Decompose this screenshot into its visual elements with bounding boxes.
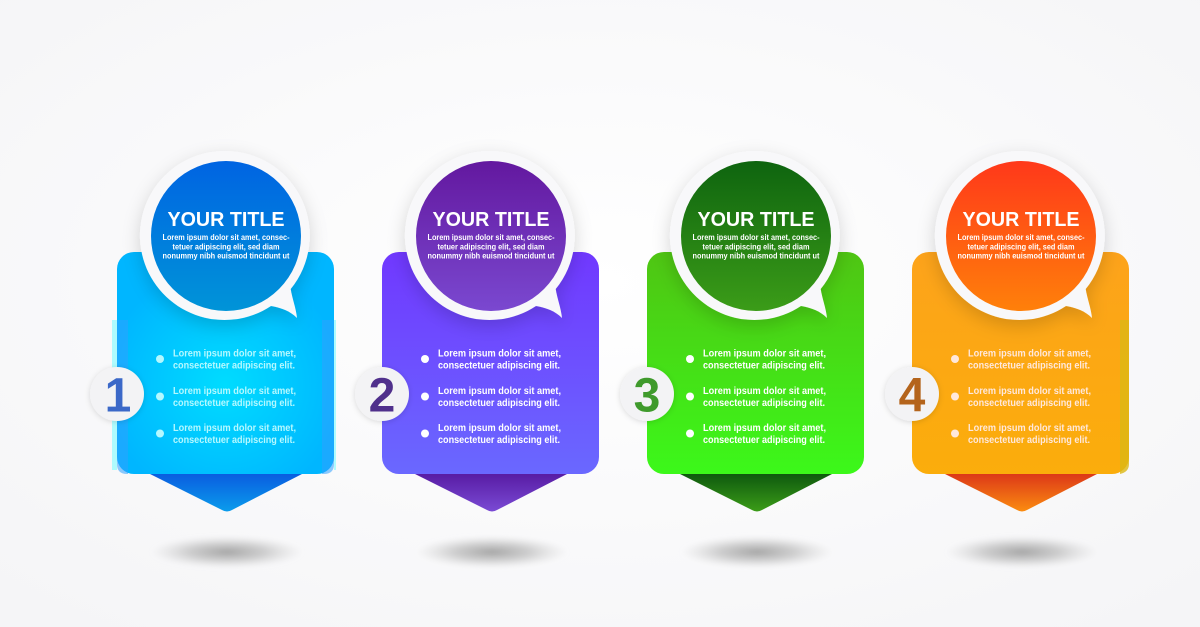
- circle description: nonummy nibh euismod tincidunt ut: [692, 250, 820, 260]
- bullet list: Lorem ipsum dolor sit amet,: [703, 423, 826, 434]
- title circle: [946, 161, 1096, 311]
- bullet list: consectetuer adipiscing elit.: [968, 360, 1090, 372]
- panel: step 4: [885, 151, 1129, 568]
- number badge 4: 4: [899, 370, 926, 422]
- speech bubble: [670, 151, 840, 320]
- circle description: nonummy nibh euismod tincidunt ut: [162, 250, 290, 260]
- bullet list: consectetuer adipiscing elit.: [173, 360, 295, 372]
- bullet list: [686, 348, 826, 446]
- card body: [912, 252, 1129, 474]
- arrow tab: [680, 474, 832, 512]
- bullet list: Lorem ipsum dolor sit amet,: [438, 348, 561, 360]
- circle description: Lorem ipsum dolor sit amet, consec-: [162, 232, 290, 242]
- bullet list: Lorem ipsum dolor sit amet,: [968, 423, 1091, 434]
- title circle: [416, 161, 566, 311]
- circle description: [692, 232, 820, 260]
- circle description: tetuer adipiscing elit, sed diam: [438, 242, 544, 252]
- bullet list: Lorem ipsum dolor sit amet,: [968, 386, 1091, 397]
- artefact fringe: [112, 320, 336, 470]
- circle description: Lorem ipsum dolor sit amet, consec-: [692, 232, 820, 242]
- circle description: [958, 232, 1085, 260]
- circle title: YOUR TITLE: [432, 209, 550, 231]
- panel: step 1: [90, 151, 336, 568]
- panel: step 2: [355, 151, 599, 568]
- bullet list: consectetuer adipiscing elit.: [173, 435, 295, 446]
- bullet list: consectetuer adipiscing elit.: [703, 360, 825, 372]
- circle description: tetuer adipiscing elit, sed diam: [702, 242, 810, 252]
- number badge 3: [620, 367, 674, 422]
- bullet list: consectetuer adipiscing elit.: [968, 398, 1090, 409]
- number badge 3: 3: [634, 370, 660, 422]
- circle description: Lorem ipsum dolor sit amet, consec-: [428, 232, 555, 242]
- arrow tab: [150, 474, 302, 512]
- bullet list: Lorem ipsum dolor sit amet,: [173, 386, 296, 397]
- circle title: YOUR TITLE: [168, 209, 284, 231]
- card side tint: [117, 320, 334, 474]
- title circle: [151, 161, 301, 311]
- circle description: Lorem ipsum dolor sit amet, consec-: [958, 232, 1085, 242]
- bullet list: consectetuer adipiscing elit.: [438, 435, 560, 446]
- speech bubble: [935, 151, 1105, 320]
- title circle: [681, 161, 831, 311]
- artefact fringe: [1120, 320, 1129, 474]
- circle description: tetuer adipiscing elit, sed diam: [968, 242, 1074, 252]
- bullet list: consectetuer adipiscing elit.: [703, 398, 825, 409]
- arrow tab: [945, 474, 1097, 512]
- bullet list: Lorem ipsum dolor sit amet,: [703, 386, 826, 397]
- panel: step 3: [620, 151, 864, 568]
- bullet list: Lorem ipsum dolor sit amet,: [173, 348, 296, 360]
- bullet list: consectetuer adipiscing elit.: [703, 435, 825, 446]
- bullet list: [156, 348, 296, 446]
- circle title: YOUR TITLE: [962, 209, 1080, 231]
- ground shadow: [151, 536, 303, 568]
- card body: [382, 252, 599, 474]
- bullet list: Lorem ipsum dolor sit amet,: [438, 386, 561, 397]
- number badge 4: [885, 367, 939, 422]
- circle description: [428, 232, 555, 260]
- bullet list: Lorem ipsum dolor sit amet,: [703, 348, 826, 360]
- bullet list: [421, 348, 561, 446]
- circle description: tetuer adipiscing elit, sed diam: [172, 242, 280, 252]
- number badge 1: 1: [105, 370, 131, 422]
- bullet list: consectetuer adipiscing elit.: [968, 435, 1090, 446]
- bullet list: Lorem ipsum dolor sit amet,: [438, 423, 561, 434]
- bullet list: [951, 348, 1091, 446]
- number badge 2: 2: [369, 370, 395, 422]
- bullet list: consectetuer adipiscing elit.: [438, 398, 560, 409]
- ground shadow: [416, 536, 568, 568]
- ground shadow: [946, 536, 1098, 568]
- speech bubble: [140, 151, 310, 320]
- ground shadow: [681, 536, 833, 568]
- bullet list: consectetuer adipiscing elit.: [438, 360, 560, 372]
- bullet list: consectetuer adipiscing elit.: [173, 398, 295, 409]
- card body: [117, 252, 334, 474]
- bullet list: Lorem ipsum dolor sit amet,: [968, 348, 1091, 360]
- circle description: nonummy nibh euismod tincidunt ut: [958, 250, 1085, 260]
- circle description: [162, 232, 290, 260]
- number badge 1: [90, 367, 144, 422]
- speech bubble: [405, 151, 575, 320]
- arrow tab: [415, 474, 567, 512]
- number badge 2: [355, 367, 409, 422]
- card body: [647, 252, 864, 474]
- circle title: YOUR TITLE: [698, 209, 814, 231]
- circle description: nonummy nibh euismod tincidunt ut: [428, 250, 555, 260]
- bullet list: Lorem ipsum dolor sit amet,: [173, 423, 296, 434]
